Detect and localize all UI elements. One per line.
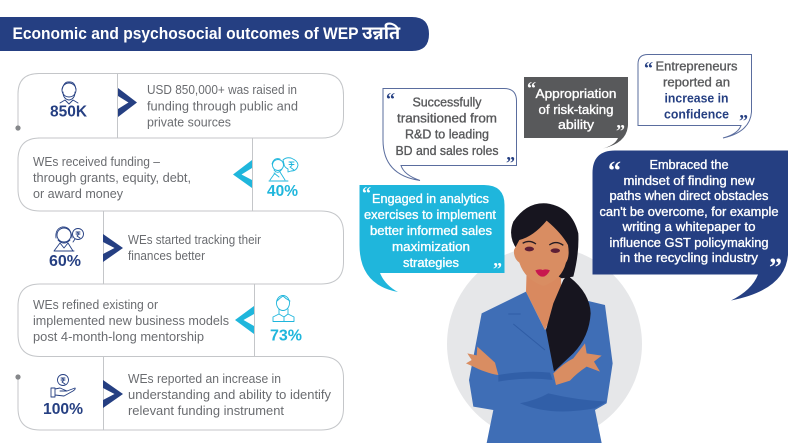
left hand	[466, 347, 498, 375]
face	[514, 221, 569, 286]
speech bubble: mindset: mindset of finding new	[624, 173, 755, 188]
speech bubble: analytics: ”	[493, 259, 502, 279]
speech bubble: mindset: influence GST policymaking	[610, 235, 768, 250]
sleeve shading	[498, 372, 607, 412]
speech bubble: confidence	[638, 54, 752, 138]
panel: 100% funding instrument understanding: understanding and ability to identify	[128, 387, 331, 402]
neck	[526, 270, 562, 330]
speech bubble: analytics: maximization	[392, 239, 470, 254]
panel: 73% refined business models: post 4-month-long mentorship	[33, 329, 204, 344]
panel: 100% funding instrument understanding: WEs reported an increase in	[128, 371, 281, 386]
eyes	[525, 247, 534, 251]
speech bubble: risk-taking	[524, 77, 628, 148]
speech bubble: mindset: Embraced the	[650, 157, 728, 172]
speech bubble: mindset: writing a whitepaper to	[621, 219, 756, 234]
panel: 73% refined business models: 73%	[270, 328, 302, 344]
title banner	[0, 17, 429, 51]
speech bubble: R&D to sales roles: transitioned from	[397, 111, 497, 126]
panel: 850K funding raised	[15, 74, 344, 138]
speech bubble: risk-taking: ”	[616, 121, 625, 141]
speech bubble: confidence: “	[644, 58, 653, 78]
speech bubble: mindset: paths when direct obstacles	[610, 188, 769, 203]
speech bubble: analytics: “	[362, 183, 371, 203]
panel: 60% tracking finances	[49, 211, 344, 284]
speech bubble: confidence: increase in	[664, 91, 729, 106]
jacket	[469, 292, 613, 443]
speech bubble: R&D to sales roles: R&D to leading	[405, 127, 489, 142]
illustration: woman with folded arms	[447, 203, 642, 443]
speech bubble: risk-taking: of risk-taking	[538, 102, 614, 117]
panel: 60% tracking finances: WEs started tracking their	[128, 232, 262, 247]
panel: 100% funding instrument understanding: 100%	[43, 401, 83, 418]
ponytail	[546, 267, 591, 372]
lips	[535, 269, 550, 277]
hair back	[511, 203, 578, 278]
panel: 40% received funding: or award money	[33, 186, 123, 201]
panel: 60% tracking finances: 60%	[49, 253, 81, 270]
speech bubble: analytics: strategies	[403, 255, 459, 270]
title banner: उन्नति	[362, 23, 401, 43]
panel: 100% funding instrument understanding	[15, 356, 344, 430]
panel: 60% tracking finances: finances better	[128, 248, 206, 263]
panel: 40% received funding: 40%	[267, 183, 298, 200]
speech bubble: risk-taking: “	[527, 78, 536, 98]
speech bubble: R&D to sales roles: BD and sales roles	[396, 143, 499, 158]
panel: 40% received funding	[18, 138, 298, 211]
panel: 40% received funding: WEs received funding –	[33, 154, 161, 169]
speech bubble: analytics: Engaged in analytics	[372, 191, 489, 206]
panel: 100% funding instrument understanding: relevant funding instrument	[128, 403, 284, 418]
panel: 850K funding raised: USD 850,000+ was raised in	[147, 82, 297, 97]
speech bubble: R&D to sales roles	[383, 88, 516, 180]
speech bubble: confidence: reported an	[663, 75, 730, 90]
speech bubble: analytics: exercises to implement	[364, 207, 496, 222]
speech bubble: analytics: better informed sales	[370, 223, 492, 238]
panel: 40% received funding: through grants, equity, debt,	[33, 170, 191, 185]
panel: 850K funding raised: 850K	[50, 104, 87, 120]
speech bubble: mindset: can't be overcome, for example	[600, 204, 778, 219]
speech bubble: mindset: ”	[769, 253, 782, 282]
speech bubble: confidence: ”	[739, 111, 748, 131]
speech bubble: R&D to sales roles: ”	[506, 153, 515, 173]
speech bubble: risk-taking: Appropriation	[536, 86, 616, 101]
panel: 73% refined business models	[18, 284, 302, 356]
speech bubble: mindset: “	[608, 156, 621, 185]
speech bubble: R&D to sales roles: Successfully	[412, 95, 482, 110]
speech bubble: R&D to sales roles: “	[386, 89, 395, 109]
speech bubble: confidence: confidence	[664, 106, 729, 122]
background circle	[447, 246, 642, 442]
panel: 850K funding raised: private sources	[147, 114, 231, 130]
panel: 850K funding raised: funding through public and	[147, 98, 298, 114]
title banner: Economic and psychosocial outcomes of WEP	[12, 24, 358, 43]
speech bubble: mindset: in the recycling industry	[620, 250, 759, 265]
speech bubble: analytics	[360, 183, 504, 292]
speech bubble: mindset	[592, 150, 788, 300]
brows	[523, 241, 563, 245]
speech bubble: risk-taking: ability	[558, 117, 595, 132]
panel: 73% refined business models: implemented new business models	[33, 313, 229, 328]
speech bubble: confidence: Entrepreneurs	[656, 59, 738, 74]
right hand	[553, 343, 602, 385]
panel: 73% refined business models: WEs refined existing or	[33, 297, 159, 312]
